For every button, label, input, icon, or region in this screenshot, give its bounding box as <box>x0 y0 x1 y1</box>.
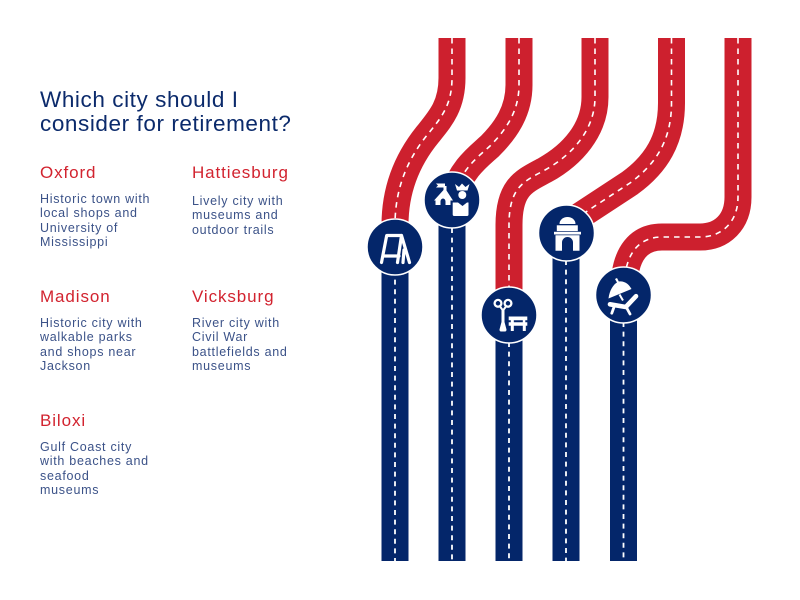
icon: beach umbrella and lounger <box>596 267 652 323</box>
heading: Madison: Madison <box>40 287 111 306</box>
heading: Oxford: Oxford <box>40 163 96 182</box>
road 1: Oxford <box>382 38 452 561</box>
text: Vicksburg description: River city with <box>192 316 280 330</box>
title: Which city should I <box>40 87 239 112</box>
text: Oxford description: University of <box>40 221 118 235</box>
icon: tent and king <box>424 172 480 228</box>
icon: street lamp and bench <box>481 287 537 343</box>
text: Biloxi description: seafood <box>40 469 90 483</box>
text: Hattiesburg description: Lively city with <box>192 194 283 208</box>
text: Oxford description: Mississippi <box>40 235 108 249</box>
text: Vicksburg description: Civil War <box>192 330 248 344</box>
text: Hattiesburg description: museums and <box>192 208 278 222</box>
text: Hattiesburg description: outdoor trails <box>192 223 274 237</box>
heading: Hattiesburg: Hattiesburg <box>192 163 289 182</box>
text: Biloxi description: with beaches and <box>40 454 149 468</box>
heading: Biloxi: Biloxi <box>40 411 86 430</box>
text: Madison description: and shops near <box>40 345 136 359</box>
road 2: Hattiesburg <box>438 38 519 561</box>
text: Madison description: walkable parks <box>40 330 133 344</box>
icon: memorial arch <box>538 205 594 261</box>
road 5: Biloxi <box>610 38 738 561</box>
text: Hattiesburg description <box>192 194 283 237</box>
road 4: Vicksburg <box>552 38 672 561</box>
text: Oxford description: local shops and <box>40 206 138 220</box>
text: Vicksburg description <box>192 316 288 373</box>
icon: A-frame sign <box>367 219 423 275</box>
text: Vicksburg description: battlefields and <box>192 345 288 359</box>
text: Oxford description <box>40 192 150 249</box>
heading: Vicksburg: Vicksburg <box>192 287 274 306</box>
text: Madison description: Historic city with <box>40 316 143 330</box>
text: Madison description <box>40 316 143 373</box>
text: Biloxi description <box>40 440 149 497</box>
title: consider for retirement? <box>40 110 292 136</box>
text: Vicksburg description: museums <box>192 359 251 373</box>
title <box>40 87 292 136</box>
road 3: Madison <box>496 38 595 561</box>
text: Biloxi description: Gulf Coast city <box>40 440 132 454</box>
text: Madison description: Jackson <box>40 359 91 373</box>
text: Biloxi description: museums <box>40 483 99 497</box>
text: Oxford description: Historic town with <box>40 192 150 206</box>
